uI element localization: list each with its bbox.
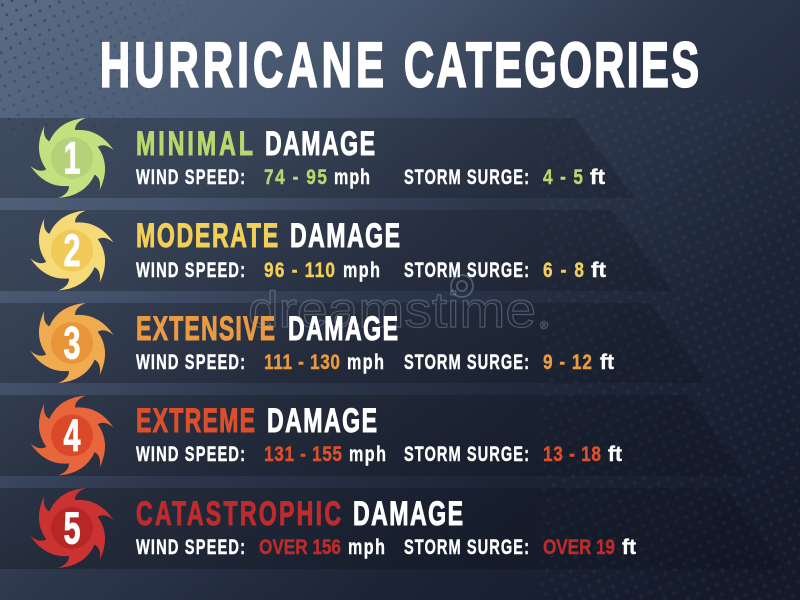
icon: category 1 hurricane [26,118,118,198]
icon: category 5 hurricane: 5 [63,504,81,554]
stats: category 5: ft [622,535,636,559]
stats: category 2: 96 - 110 [264,258,335,283]
stats: category 5: OVER 19 [543,535,615,560]
heading: catastrophic damage: DAMAGE [353,496,463,533]
stats: category 3: WIND SPEED: [136,349,245,374]
stats: category 1 [136,164,605,190]
stats: category 3: ft [600,350,614,374]
category 1 row [26,118,605,198]
icon: category 1 hurricane: 1 [63,134,81,184]
stats: category 2 [136,257,606,283]
heading: extreme damage: EXTREME [136,403,255,440]
stats: category 5: STORM SURGE: [404,534,529,559]
stats: category 1: 74 - 95 [264,165,327,190]
stats: category 1: ft [590,165,605,189]
stats: category 4 [136,441,622,467]
stats: category 4: STORM SURGE: [404,441,529,466]
stats: category 5: OVER 156 [259,535,341,560]
stats: category 2: mph [343,259,380,283]
band: category 2 [0,210,672,291]
heading: extreme damage: DAMAGE [267,403,377,440]
heading: minimal damage [136,126,375,163]
icon: category 3 hurricane: 3 [63,319,81,369]
stats: category 3 [136,349,614,375]
band: category 4 [0,395,745,476]
watermark: ® [540,320,548,332]
stats: category 5: mph [348,536,385,560]
icon: category 4 hurricane [26,396,118,476]
stats: category 1: 4 - 5 [543,165,583,190]
heading: moderate damage: DAMAGE [290,218,400,255]
category 3 row [26,303,614,383]
band: category 5 [0,488,785,569]
heading: extensive damage: EXTENSIVE [136,311,275,348]
heading: catastrophic damage [136,496,463,533]
stats: category 1: mph [334,166,370,190]
stats: category 3: mph [347,351,384,375]
stats: category 3: 111 - 130 [264,350,340,375]
category 4 row [26,396,622,476]
heading: moderate damage: MODERATE [136,218,278,255]
heading: extensive damage [136,311,398,348]
heading: catastrophic damage: CATASTROPHIC [136,496,341,533]
stats: category 2: STORM SURGE: [404,257,529,282]
stats: category 2: WIND SPEED: [136,257,245,282]
icon: category 4 hurricane: 4 [63,411,81,462]
category 2 row [26,210,606,290]
icon: category 5 hurricane [26,488,118,568]
stats: category 4: WIND SPEED: [136,441,245,466]
stats: category 3: 9 - 12 [543,350,592,375]
category 5 row [26,488,636,568]
heading: extensive damage: DAMAGE [288,311,398,348]
icon: category 2 hurricane: 2 [63,226,81,277]
stats: category 5 [136,534,636,560]
heading: extreme damage [136,403,377,440]
stats: category 4: ft [608,442,622,466]
stats: category 4: 13 - 18 [543,442,601,467]
stats: category 1: STORM SURGE: [404,164,529,189]
stats: category 5: WIND SPEED: [136,534,245,559]
icon: category 2 hurricane [26,210,118,290]
heading: minimal damage: DAMAGE [265,126,375,163]
stats: category 2: 6 - 8 [543,258,584,283]
watermark: dreamstime [248,282,536,338]
title: CATEGORIES [404,31,699,101]
stats: category 3: STORM SURGE: [404,349,529,374]
band: category 1 [0,118,635,198]
stats: category 4: mph [349,443,386,467]
stats: category 4: 131 - 155 [264,442,342,467]
band: category 3 [0,303,708,383]
icon: category 3 hurricane [26,303,118,383]
heading: minimal damage: MINIMAL [136,126,253,163]
stats: category 1: WIND SPEED: [136,164,245,189]
stats: category 2: ft [591,258,606,282]
title [100,31,699,101]
heading: moderate damage [136,218,400,255]
title: HURRICANE [100,31,384,101]
